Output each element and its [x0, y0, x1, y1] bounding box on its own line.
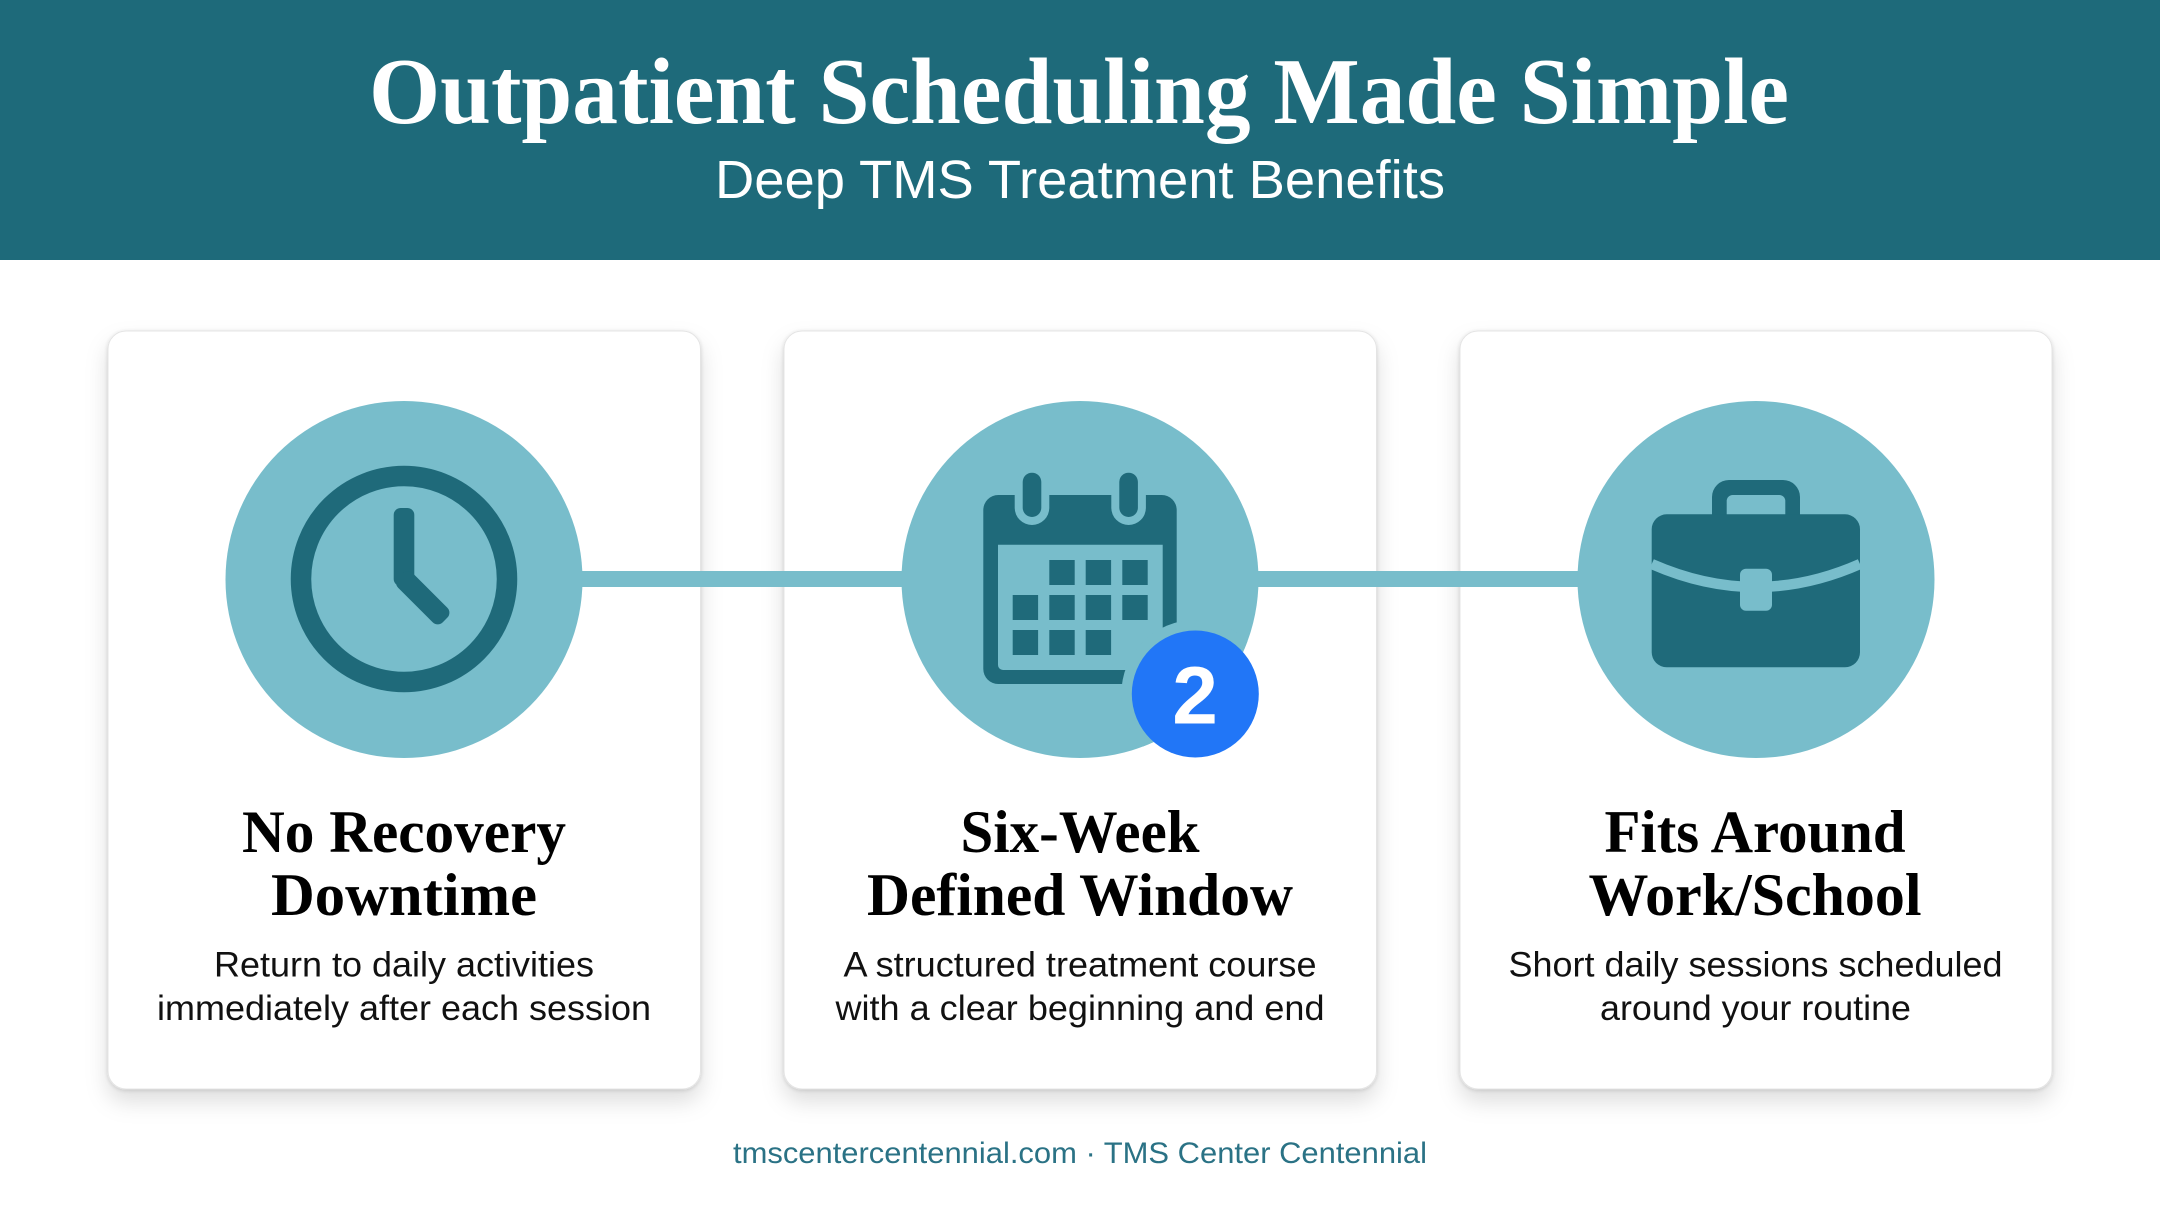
- subtitle: Deep TMS Treatment Benefits: [715, 150, 1445, 210]
- card 1 heading: No Recovery: [242, 799, 566, 865]
- title: Outpatient Scheduling Made Simple: [369, 40, 1789, 144]
- card 2 heading: Six-Week: [960, 799, 1200, 865]
- icon: calendar with badge: [902, 401, 1269, 768]
- card 1 text: [157, 946, 651, 1028]
- card 3 heading: Fits Around: [1604, 799, 1906, 865]
- card 3 text: Short daily sessions scheduled: [1508, 946, 2002, 985]
- panel: six-week defined window: [784, 331, 1376, 1089]
- card 1 text: Return to daily activities: [214, 946, 594, 985]
- panel: fits around work/school: [1460, 331, 2052, 1089]
- card 1 heading: [242, 799, 566, 928]
- card 3 heading: Work/School: [1588, 862, 1922, 928]
- footer: tmscentercentennial.com · TMS Center Centennial: [733, 1137, 1427, 1170]
- panel: no recovery downtime: [108, 331, 700, 1089]
- card 3 text: [1508, 946, 2002, 1028]
- badge: number 2: 2: [1172, 650, 1218, 742]
- connector line: [570, 571, 1590, 587]
- card 2 heading: [867, 799, 1294, 928]
- header banner: [0, 0, 2160, 260]
- card 2 text: with a clear beginning and end: [834, 989, 1324, 1028]
- icon: clock: [226, 401, 582, 758]
- card 2 text: [834, 946, 1324, 1028]
- card 2 heading: Defined Window: [867, 862, 1294, 928]
- card 3 text: around your routine: [1600, 989, 1911, 1028]
- card 3 heading: [1588, 799, 1922, 928]
- card 1 heading: Downtime: [271, 862, 537, 928]
- icon: briefcase: [1578, 401, 1934, 758]
- card 2 text: A structured treatment course: [844, 946, 1316, 985]
- card 1 text: immediately after each session: [157, 989, 651, 1028]
- badge: number 2: [1132, 630, 1259, 758]
